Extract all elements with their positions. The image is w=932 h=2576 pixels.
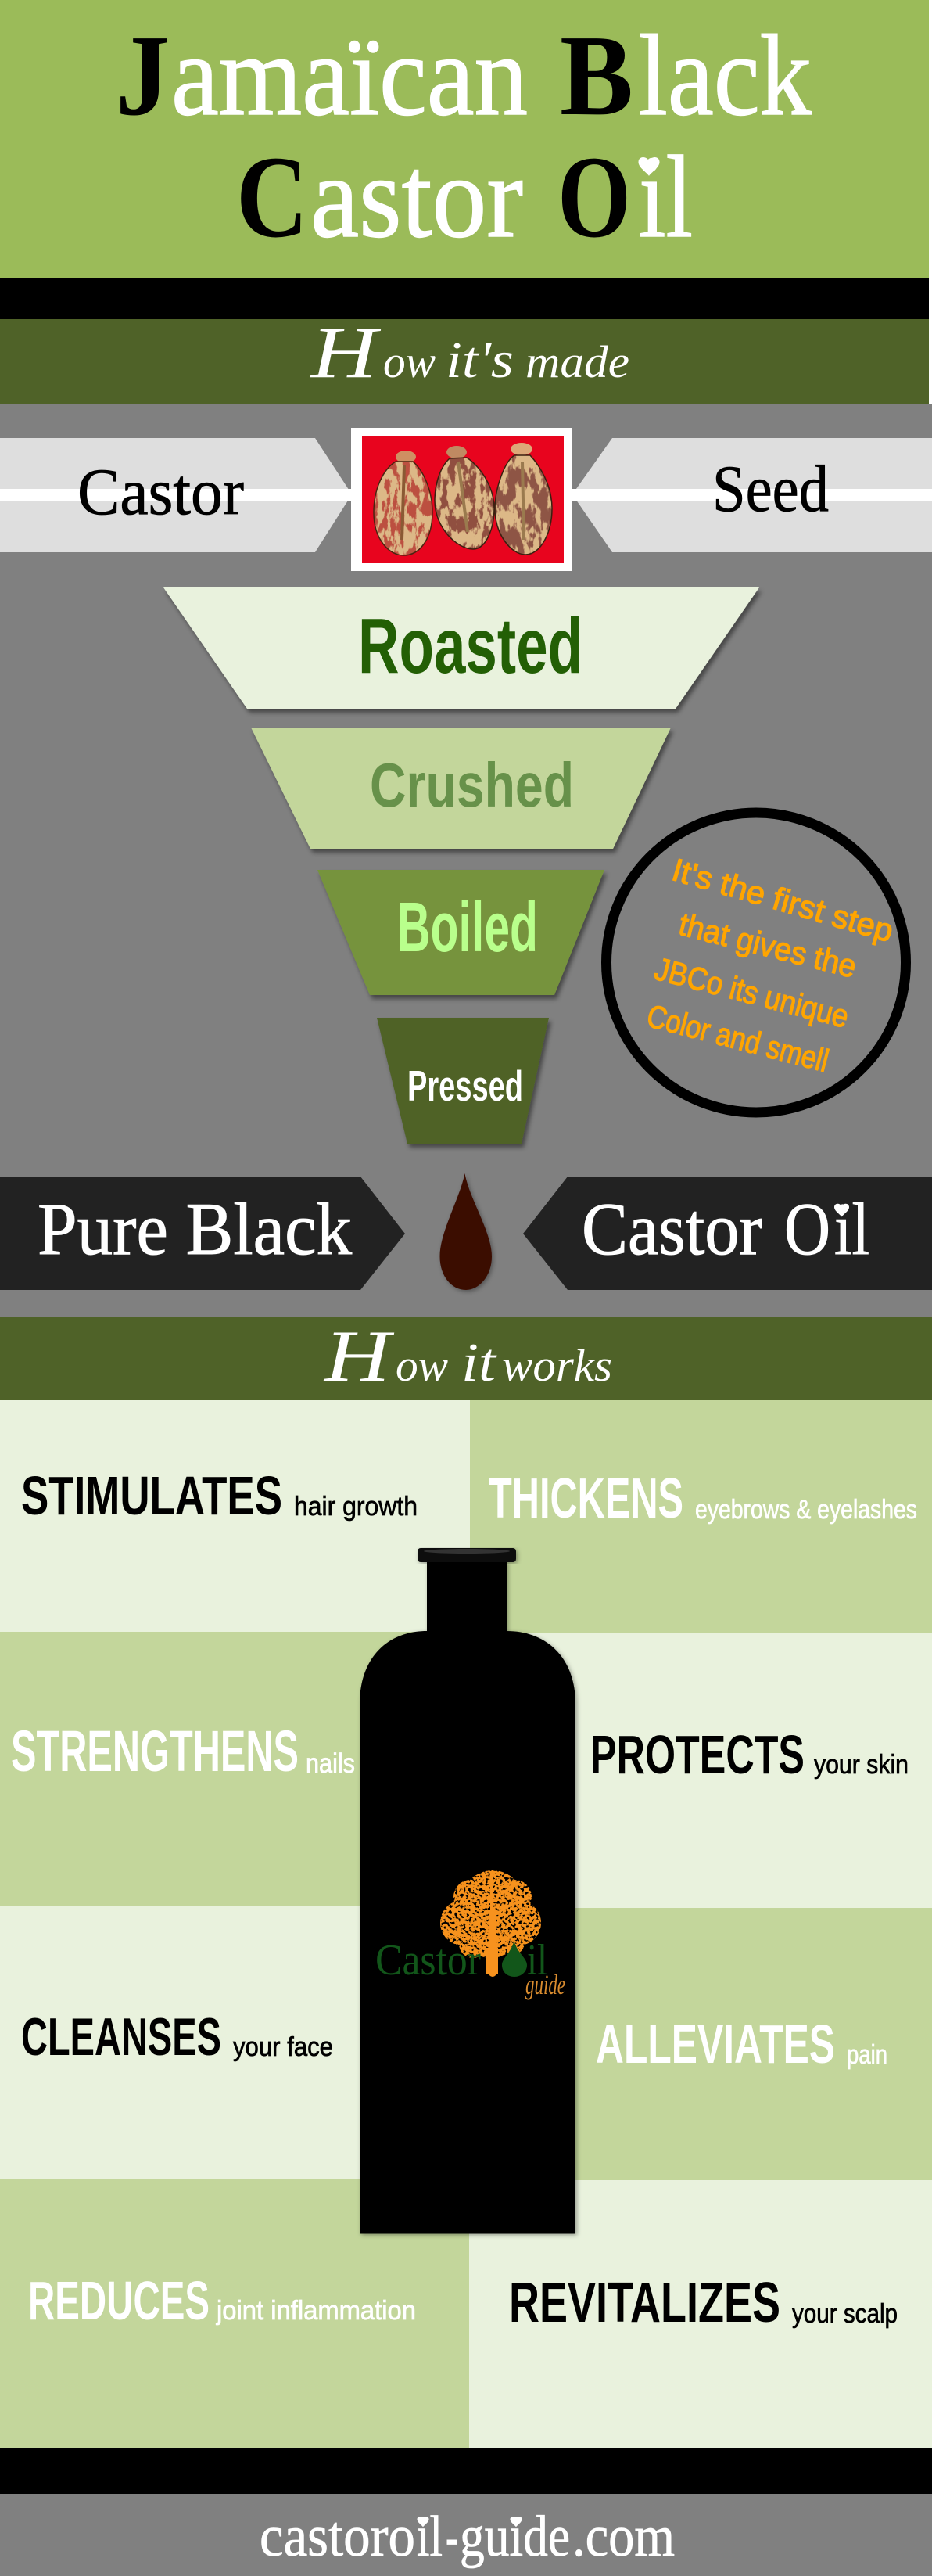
logo: il [527, 1936, 547, 1985]
tree trunk and branches [444, 1875, 538, 1973]
callout circle [607, 813, 905, 1112]
benefit: reduces: joint inflammation [216, 2296, 416, 2326]
seed label arrow [572, 438, 932, 552]
title line 1: J [116, 12, 170, 140]
section header: how it's made: made [525, 336, 629, 387]
benefit: thickens: THICKENS [489, 1468, 683, 1530]
title line 2: il [639, 132, 693, 262]
funnel step: roasted [163, 587, 759, 709]
funnel step: boiled [317, 870, 604, 995]
black band bottom [0, 2448, 932, 2494]
benefit: reduces [0, 2179, 469, 2448]
funnel step: pressed [377, 1018, 549, 1144]
title line 2: astor [310, 132, 523, 262]
section header: how it works [0, 1316, 932, 1400]
benefit: cleanses: your face [233, 2032, 333, 2062]
funnel step: boiled: Boiled [397, 889, 538, 967]
callout circle: JBCo its unique [651, 950, 852, 1035]
title line 1: lack [639, 12, 812, 140]
benefit: protects: PROTECTS [590, 1724, 805, 1785]
benefit: strengthens: STRENGTHENS [11, 1719, 299, 1784]
funnel step: crushed: Crushed [370, 750, 574, 820]
footer: .com [572, 2505, 675, 2569]
callout circle: Color and smell [643, 997, 833, 1079]
benefit: cleanses [0, 1906, 470, 2179]
pure black arrow [0, 1177, 405, 1290]
benefit: protects: your skin [814, 1750, 909, 1780]
benefit: cleanses: CLEANSES [21, 2007, 221, 2067]
callout circle: It's the first step [669, 851, 898, 949]
castor oil arrow: Castor [582, 1187, 762, 1270]
section header: how it's made: ow [383, 336, 436, 387]
icon: heart dot on title i [638, 157, 660, 176]
funnel step: crushed [251, 728, 671, 849]
gray process panel [0, 404, 932, 1317]
benefit: revitalizes [469, 2180, 932, 2448]
tree crown [440, 1870, 541, 1958]
benefit: stimulates: hair growth [294, 1492, 418, 1522]
pure black arrow: Pure Black [38, 1187, 352, 1270]
castor seeds photo [351, 428, 572, 571]
benefit: stimulates [0, 1400, 470, 1632]
benefit: alleviates [470, 1908, 932, 2180]
seed label arrow: Seed [712, 452, 829, 526]
logo: guide [525, 1969, 565, 2000]
seed 3 [495, 443, 552, 555]
title line 1: amaïcan [171, 12, 528, 140]
title line 2: C [236, 132, 308, 262]
section header: how it works: H [323, 1316, 395, 1397]
footer: castoro [260, 2505, 415, 2569]
icon: oil drop [439, 1173, 492, 1290]
castor label arrow: Castor [77, 455, 244, 529]
icon: footer heart dots [418, 2517, 522, 2527]
benefit: revitalizes: your scalp [792, 2299, 898, 2329]
seed 1 [374, 451, 432, 555]
title line 2: O [557, 132, 631, 262]
section header: how it's made: it's [446, 332, 514, 389]
icon: heart dot on arrow i [834, 1204, 849, 1216]
footer: guide [460, 2505, 570, 2569]
section header: how it works: ow [396, 1340, 448, 1391]
section header: how it works: works [502, 1340, 612, 1391]
logo [375, 1870, 565, 2000]
funnel step: roasted: Roasted [358, 602, 582, 690]
black band top [0, 278, 929, 319]
benefit: reduces: REDUCES [28, 2270, 210, 2331]
seed 2 [435, 446, 494, 549]
benefit: protects [470, 1633, 932, 1908]
footer: il [417, 2505, 443, 2569]
section header: how it's made [0, 312, 929, 404]
callout circle: that gives the [676, 906, 860, 985]
footer [0, 2494, 932, 2576]
footer: - [446, 2505, 458, 2569]
benefit: revitalizes: REVITALIZES [509, 2272, 780, 2334]
benefit: strengthens [0, 1632, 470, 1906]
title panel [0, 0, 929, 278]
benefit: stimulates: STIMULATES [21, 1465, 282, 1526]
castor oil arrow: O [784, 1187, 830, 1270]
logo: Castor [375, 1936, 481, 1985]
castor label arrow [0, 438, 352, 552]
funnel step: pressed: Pressed [407, 1062, 523, 1110]
benefit: strengthens: nails [306, 1748, 355, 1779]
castor oil arrow [523, 1177, 932, 1290]
benefit: alleviates: pain [847, 2040, 887, 2070]
bottle [360, 1548, 575, 2234]
benefit: thickens [470, 1400, 932, 1633]
title line 1: B [560, 12, 633, 140]
benefit: alleviates: ALLEVIATES [596, 2014, 835, 2075]
section header: how it's made: H [310, 312, 382, 393]
section header: how it works: it [461, 1333, 497, 1393]
castor oil arrow: il [834, 1187, 869, 1270]
